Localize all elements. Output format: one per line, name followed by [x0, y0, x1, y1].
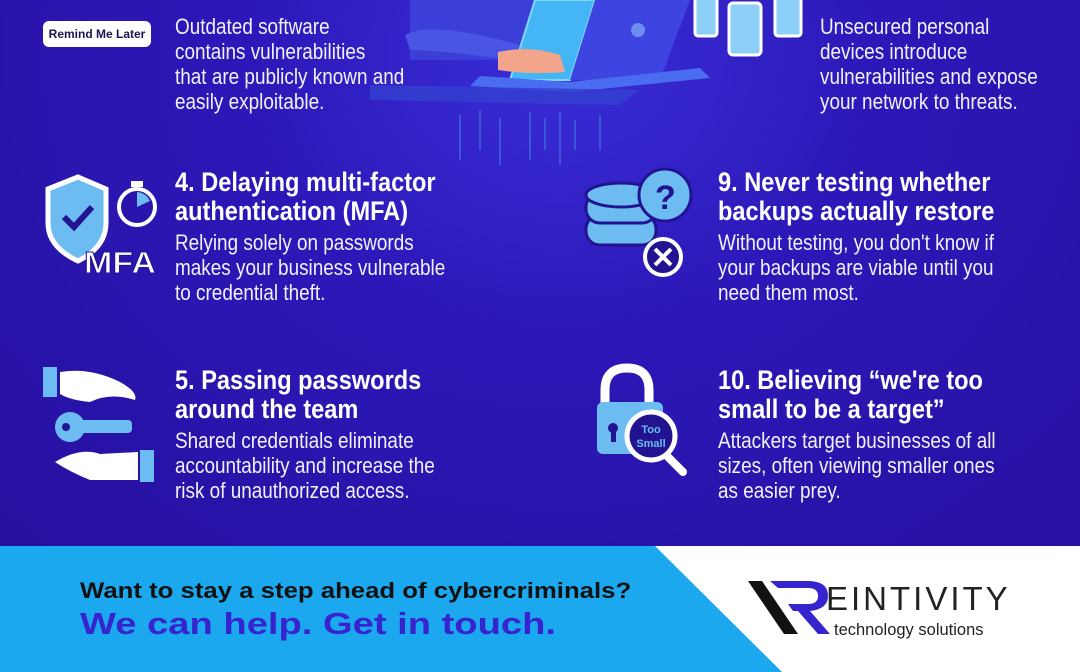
text: item 10: 10. Believing “we're too	[718, 365, 983, 395]
text: item 3 body: Outdated software	[175, 14, 330, 39]
text: item 8 body: your network to threats.	[820, 89, 1018, 114]
text: item 9	[718, 167, 994, 305]
text: item 9: your backups are viable until you	[718, 255, 994, 280]
text: item 5	[175, 365, 435, 503]
text: item 3 body	[175, 14, 404, 114]
text: item 4: authentication (MFA)	[175, 196, 408, 226]
text: item 9: backups actually restore	[718, 196, 994, 226]
text: item 4: 4. Delaying multi-factor	[175, 167, 436, 197]
text: item 3 body: that are publicly known and	[175, 64, 404, 89]
icon: padlock too small	[597, 364, 687, 476]
text: item 3 body: easily exploitable.	[175, 89, 324, 114]
icon: backup database: ?	[655, 179, 676, 217]
text: item 9: need them most.	[718, 280, 859, 305]
text: item 9: Without testing, you don't know if	[718, 230, 994, 255]
text: item 4: Relying solely on passwords	[175, 230, 414, 255]
text: item 3 body: contains vulnerabilities	[175, 39, 365, 64]
text: item 4: makes your business vulnerable	[175, 255, 445, 280]
icon: MFA shield	[46, 174, 157, 280]
text: item 4: to credential theft.	[175, 280, 325, 305]
text: item 8 body: Unsecured personal	[820, 14, 989, 39]
text: item 10: as easier prey.	[718, 478, 841, 503]
text: item 8 body	[820, 14, 1038, 114]
text: item 5: Shared credentials eliminate	[175, 428, 414, 453]
text: item 5: risk of unauthorized access.	[175, 478, 410, 503]
illustration: hacker at laptop	[370, 0, 710, 165]
icon: backup database	[584, 168, 692, 277]
text: item 4	[175, 167, 445, 305]
text: item 10: Attackers target businesses of all	[718, 428, 996, 453]
text: call to action: We can help. Get in touch.	[80, 606, 556, 641]
text: call to action	[80, 578, 631, 641]
logo: Reintivity: EINTIVITY	[826, 580, 1011, 617]
text: item 10	[718, 365, 996, 503]
icon: MFA shield: MFA	[84, 245, 156, 280]
text: item 10: small to be a target”	[718, 394, 945, 424]
footer band	[0, 546, 1080, 672]
text: item 5: around the team	[175, 394, 358, 424]
logo: Reintivity: technology solutions	[834, 621, 984, 639]
text: call to action: Want to stay a step ahead of cybercriminals?	[80, 578, 631, 603]
icon: padlock too small: Too	[641, 424, 661, 436]
logo: Reintivity	[748, 580, 1011, 639]
cyan diagonal panel	[0, 546, 782, 672]
text: item 9: 9. Never testing whether	[718, 167, 990, 197]
text: item 8 body: devices introduce	[820, 39, 967, 64]
text: item 5: accountability and increase the	[175, 453, 435, 478]
icon: remind me later button	[43, 21, 151, 47]
text: item 10: sizes, often viewing smaller ones	[718, 453, 995, 478]
icon: remind me later button: Remind Me Later	[49, 27, 145, 41]
icon: padlock too small: Small	[636, 438, 666, 450]
text: item 8 body: vulnerabilities and expose	[820, 64, 1038, 89]
icon: hands passing key	[43, 367, 154, 482]
icon: mobile devices	[694, 0, 802, 56]
text: item 5: 5. Passing passwords	[175, 365, 421, 395]
